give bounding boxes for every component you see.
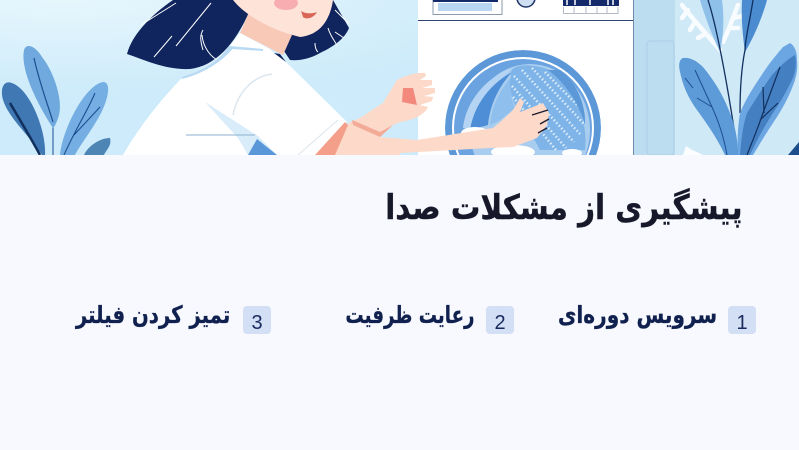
number badge 1 (728, 306, 756, 334)
label 2: رعایت ظرفیت (345, 301, 474, 329)
woman (123, 0, 549, 155)
right plant (679, 0, 799, 155)
left plant (2, 46, 110, 155)
title: پیشگیری از مشکلات صدا (385, 188, 742, 228)
door (445, 50, 601, 155)
fingers (532, 110, 549, 133)
illustration: woman loading washing machine (0, 0, 799, 155)
shirt (123, 33, 347, 155)
number badge 1: 1 (736, 312, 748, 334)
wrist shade (352, 120, 393, 137)
right side cabinet (633, 0, 799, 155)
washing machine (418, 0, 633, 155)
neck (240, 10, 292, 55)
number badge 2: 2 (494, 312, 506, 334)
far arm and raised hand (348, 73, 435, 137)
item 2: respect capacity (345, 301, 514, 334)
palm (402, 88, 417, 105)
label 3: تمیز کردن فیلتر (76, 301, 230, 329)
near arm and hand (325, 98, 549, 155)
hair highlights (141, 3, 349, 60)
number badge 3: 3 (251, 312, 263, 334)
collar (182, 47, 263, 78)
cheek (274, 0, 298, 10)
item 3: clean filter (74, 301, 271, 334)
control panel (433, 0, 619, 14)
number badge 2 (486, 306, 514, 334)
face (233, 0, 333, 37)
number badge 3 (243, 306, 271, 334)
hair (127, 0, 250, 69)
label 1: سرویس دوره‌ای (558, 301, 717, 329)
sleeve inner (315, 122, 348, 155)
mouth (301, 11, 317, 18)
item 1: periodic service (558, 301, 756, 334)
